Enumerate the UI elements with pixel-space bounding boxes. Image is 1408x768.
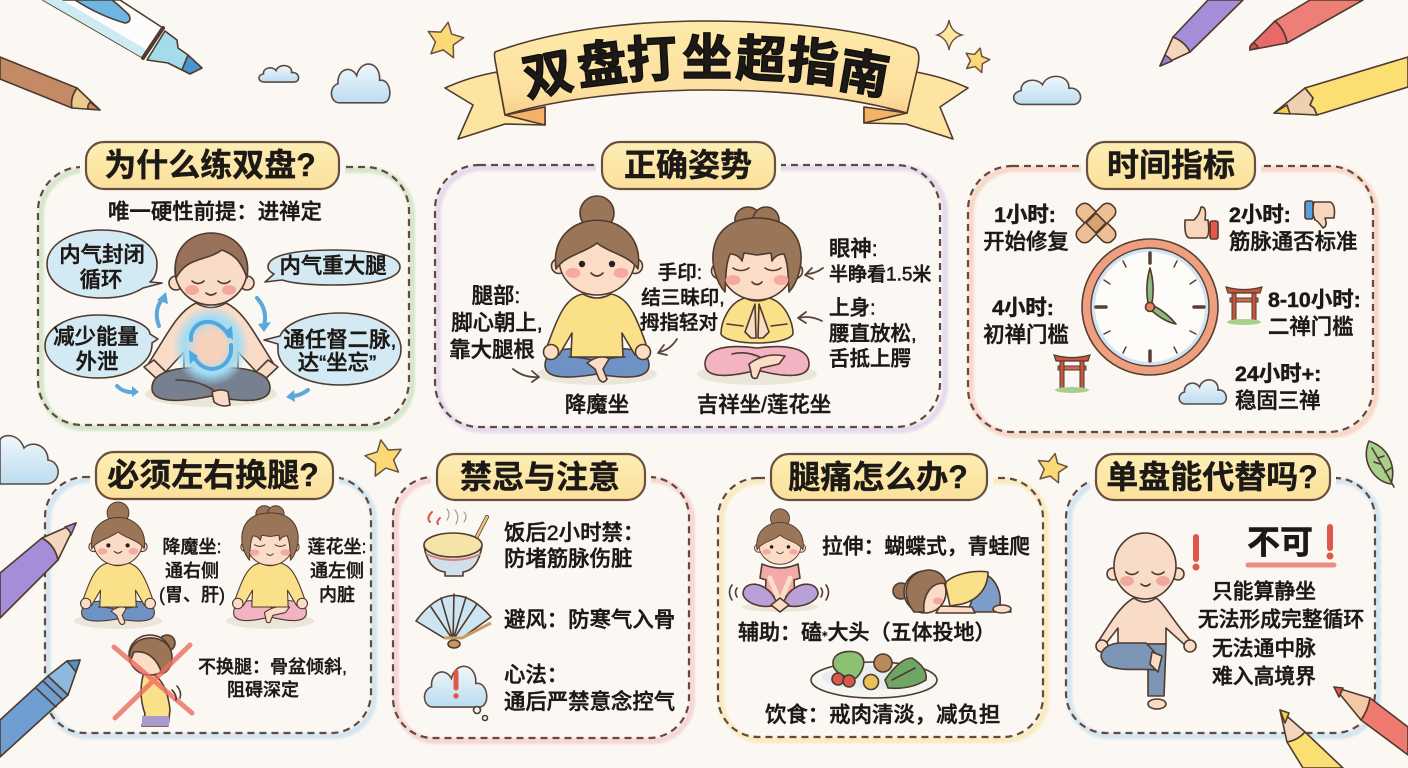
icon: thumbs up <box>1185 207 1218 239</box>
flow arrows <box>117 292 308 402</box>
label: not switching: 不换腿：骨盆倾斜, <box>198 657 347 677</box>
label: gaze: 半睁看1.5米 <box>829 264 931 286</box>
panel: can half lotus replace <box>1066 454 1378 736</box>
text: after meals: 防堵筋脉伤脏 <box>504 547 632 571</box>
marker blue bottom-left <box>0 660 80 757</box>
panel wash <box>721 481 1046 740</box>
figure: butterfly stretch <box>730 509 828 612</box>
panel wash <box>438 168 945 430</box>
figure: child pose prostration <box>893 570 1011 613</box>
label: lotus pose <box>307 537 367 605</box>
reason list: 只能算静坐 <box>1212 580 1316 604</box>
heading <box>437 454 645 500</box>
panel: taboos and cautions <box>393 454 692 741</box>
pencil red <box>1250 0 1363 50</box>
figure: half-lotus bald figure <box>1096 533 1196 709</box>
icon: rice bowl <box>424 509 487 576</box>
callout: less energy leak: 外泄 <box>76 350 118 374</box>
panel frame <box>968 166 1373 432</box>
clock <box>1082 239 1218 375</box>
reason list <box>1198 580 1364 688</box>
panel frame <box>435 165 940 427</box>
reason list: 无法通中脉 <box>1212 638 1316 660</box>
decorations: clouds and stars <box>0 19 1394 487</box>
marker top-left <box>43 0 202 74</box>
panel frame <box>393 477 689 738</box>
red underline <box>1248 562 1334 568</box>
label: legs: 脚心朝上, <box>451 311 543 335</box>
milestone 8-10 hours: 8-10小时: <box>1268 288 1361 312</box>
figure: subduing pose <box>74 502 162 629</box>
callout: qi to thighs: 内气重大腿 <box>280 254 386 278</box>
heading <box>602 142 775 189</box>
milestone 2 hours: 2小时: <box>1229 203 1291 227</box>
milestone 24 hours: 24小时+: <box>1235 362 1321 386</box>
title text: 指 <box>785 33 841 93</box>
text: diet: 饮食：戒肉清淡，减负担 <box>765 703 1000 727</box>
cloud right <box>1014 76 1081 104</box>
title text: 双 <box>518 43 578 107</box>
label: not switching: 阻碍深定 <box>227 680 299 700</box>
reason list: 无法形成完整循环 <box>1198 608 1364 632</box>
figure: girl in lotus pose <box>697 207 817 385</box>
callout: open channels: 通任督二脉, <box>284 328 396 352</box>
panel frame <box>38 167 409 425</box>
label: upper body: 上身: <box>829 296 876 320</box>
panel wash <box>1069 481 1378 736</box>
callout: open channels <box>264 313 401 385</box>
heading: 腿痛怎么办? <box>788 459 968 495</box>
label: gaze <box>829 237 931 286</box>
ribbon right tail <box>864 72 968 139</box>
heading <box>86 142 339 189</box>
caption: lotus pose: 吉祥坐/莲花坐 <box>697 393 831 417</box>
pencil yellow bottom-right <box>1280 710 1343 768</box>
text: mind method: 心法： <box>504 663 568 687</box>
heading: 为什么练双盘? <box>104 147 316 183</box>
star small right <box>962 45 992 74</box>
icon: cloud <box>1179 380 1226 404</box>
milestone 24 hours: 稳固三禅 <box>1235 389 1321 413</box>
label: subduing pose: 通右侧 <box>165 561 219 581</box>
heading: 禁忌与注意 <box>460 459 620 495</box>
callout: qi to thighs <box>265 250 400 285</box>
label: gaze: 眼神: <box>829 237 878 261</box>
label: mudra: 结三昧印, <box>641 287 725 309</box>
label: mudra <box>640 262 725 334</box>
title text: 南 <box>835 42 893 106</box>
milestone 2 hours: 筋脉通否标准 <box>1229 230 1357 254</box>
panel frame <box>45 477 371 733</box>
text: mind method: 通后严禁意念控气 <box>504 689 675 714</box>
title banner <box>445 21 968 139</box>
milestone 1 hour <box>983 203 1069 254</box>
heading: 正确姿势 <box>624 147 752 183</box>
label: legs: 靠大腿根 <box>449 338 535 362</box>
panel: time milestones <box>968 142 1376 435</box>
text: after meals: 饭后2小时禁： <box>504 521 644 545</box>
callout: sealed qi <box>47 230 162 298</box>
panel wash <box>48 480 374 736</box>
milestone 1 hour: 开始修复 <box>983 230 1069 254</box>
icon: bandage <box>1062 189 1130 257</box>
sparkle <box>937 20 962 50</box>
title text: 打 <box>626 31 678 89</box>
caption: subduing pose: 降魔坐 <box>565 393 629 417</box>
pointer arrows <box>513 268 823 382</box>
icon: exclamation near figure <box>1192 537 1200 570</box>
label: legs: 腿部: <box>472 284 520 308</box>
heading: 时间指标 <box>1107 147 1235 183</box>
pencil brown <box>0 57 100 110</box>
panel frame <box>1066 478 1375 733</box>
label: subduing pose <box>159 537 225 605</box>
figure: tilted posture with red cross <box>114 635 192 726</box>
icon: torii left <box>1054 355 1090 393</box>
label: upper body <box>829 296 917 370</box>
heading <box>1087 142 1255 189</box>
ribbon main band <box>494 21 919 115</box>
text: after meals <box>504 521 644 571</box>
label: lotus pose: 通左侧 <box>310 561 364 581</box>
ribbon folds <box>505 107 907 125</box>
title text: 坐 <box>682 30 732 86</box>
pencil red bottom-right <box>1334 687 1408 755</box>
milestone 8-10 hours: 二禅门槛 <box>1268 315 1354 339</box>
label: upper body: 腰直放松, <box>829 322 917 346</box>
premise text: 唯一硬性前提：进禅定 <box>108 200 322 224</box>
pencil yellow top-right <box>1274 57 1408 115</box>
label: legs <box>449 284 543 362</box>
callout: open channels: 达“坐忘” <box>298 351 376 375</box>
milestone 8-10 hours <box>1268 288 1361 339</box>
verdict: not allowed: 不可 <box>1247 524 1313 560</box>
label: upper body: 舌抵上腭 <box>829 348 911 370</box>
panel: switch legs <box>45 452 374 736</box>
label: mudra: 拇指轻对 <box>640 312 718 334</box>
icon: thumbs down <box>1305 201 1334 228</box>
title text <box>518 30 893 107</box>
icon: exclamation near verdict <box>1326 527 1334 560</box>
label: lotus pose: 莲花坐: <box>307 537 367 557</box>
milestone 1 hour: 1小时: <box>994 203 1056 227</box>
leaf <box>1366 441 1394 487</box>
title text: 超 <box>735 31 787 89</box>
heading <box>771 454 987 500</box>
label: mudra: 手印: <box>658 262 702 284</box>
milestone 4 hours: 4小时: <box>992 296 1054 320</box>
cloud left <box>331 64 390 103</box>
panel wash <box>396 480 692 741</box>
panel wash <box>971 169 1376 435</box>
reason list: 难入高境界 <box>1212 666 1316 688</box>
icon: hand fan <box>416 594 491 648</box>
icon: torii right <box>1226 287 1262 325</box>
panel: correct posture <box>435 142 945 430</box>
milestone 4 hours <box>983 296 1069 347</box>
callout: sealed qi: 循环 <box>80 268 122 292</box>
cloud small left <box>259 66 299 82</box>
icon: thought cloud with warning <box>425 666 488 720</box>
star bottom left <box>363 437 405 477</box>
panel wash <box>41 170 412 428</box>
callout: sealed qi: 内气封闭 <box>59 243 145 267</box>
panel frame <box>718 478 1043 737</box>
star bottom right <box>1035 450 1070 484</box>
milestone 4 hours: 初禅门槛 <box>983 323 1069 347</box>
heading <box>96 452 333 499</box>
heading: 必须左右换腿? <box>107 457 319 493</box>
milestone 2 hours <box>1229 203 1357 254</box>
meditating boy <box>144 233 278 407</box>
milestone 24 hours <box>1235 362 1321 413</box>
figure: lotus pose <box>226 506 314 629</box>
panel: why double lotus <box>38 142 412 428</box>
text: avoid wind: 避风：防寒气入骨 <box>504 608 675 632</box>
figure: girl in subduing pose <box>537 196 657 385</box>
pencil purple bottom-left <box>0 523 76 618</box>
text: auxiliary: 辅助：磕⁎大头（五体投地） <box>738 622 996 644</box>
label: subduing pose: 降魔坐: <box>162 537 222 557</box>
label: subduing pose: (胃、肝) <box>159 585 225 605</box>
star top-left <box>424 19 466 59</box>
label: lotus pose: 内脏 <box>319 585 355 605</box>
text: mind method <box>504 663 675 714</box>
title text: 盘 <box>574 34 630 96</box>
cloud bottom-left <box>0 436 58 484</box>
pencil purple top-right <box>1160 0 1243 66</box>
heading: 单盘能代替吗? <box>1106 459 1318 495</box>
illustration: vegetable plate <box>811 651 937 698</box>
callout: less energy leak <box>45 315 158 378</box>
label: not switching <box>198 657 347 700</box>
ribbon left tail <box>445 72 545 139</box>
callout: less energy leak: 减少能量 <box>53 325 139 349</box>
panel: leg pain remedies <box>718 454 1046 740</box>
text: stretch: 拉伸：蝴蝶式，青蛙爬 <box>822 536 1030 558</box>
